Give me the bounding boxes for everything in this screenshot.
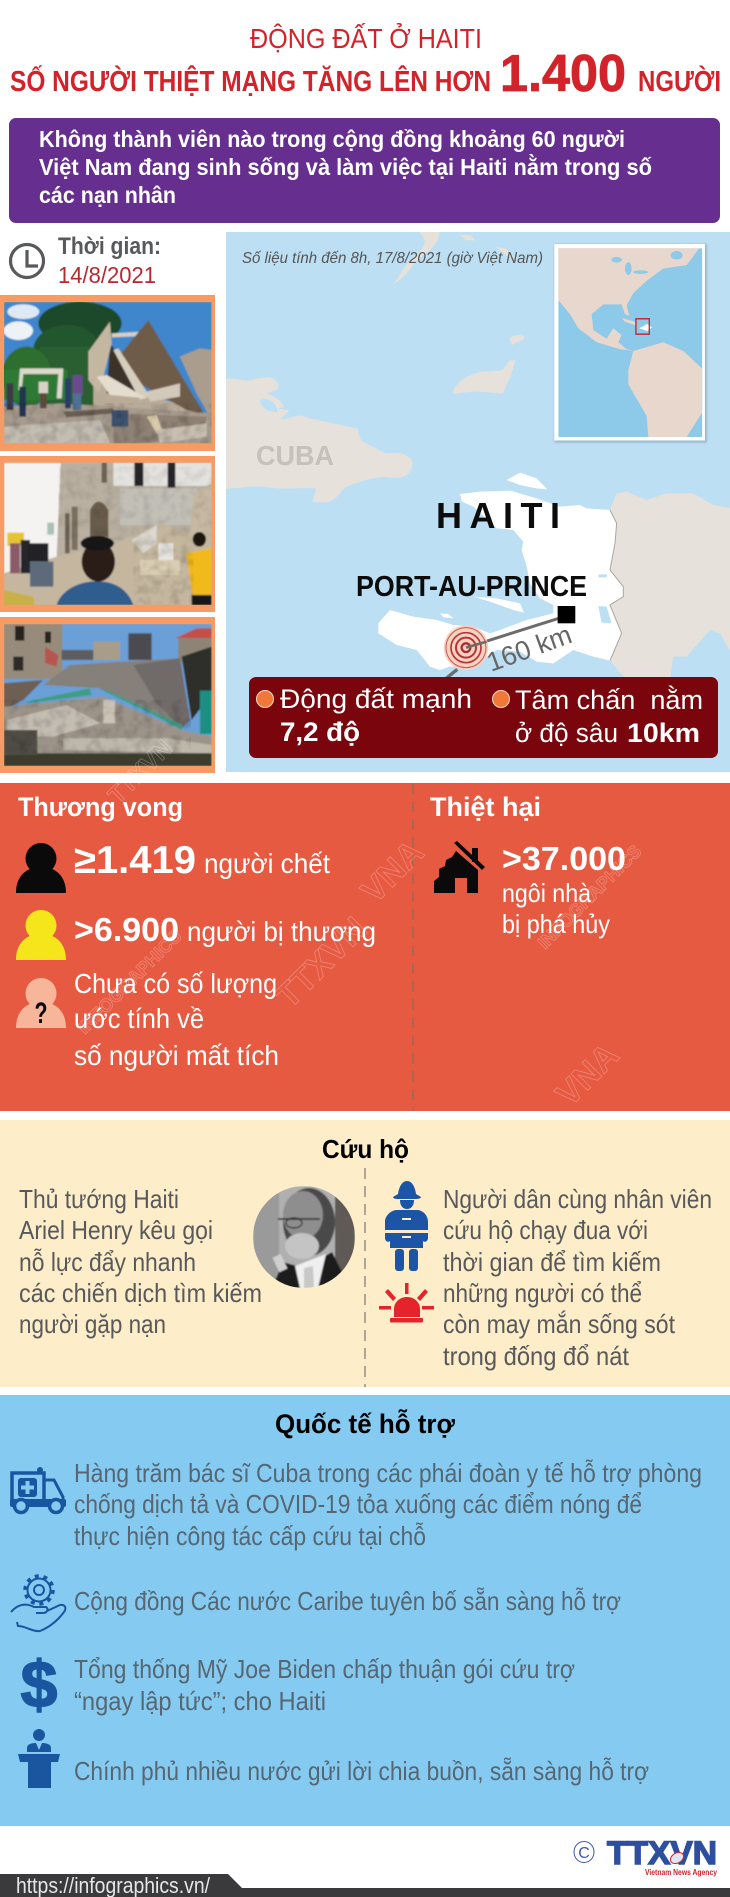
- capital marker: [558, 606, 575, 623]
- stat: missing: [74, 968, 279, 1071]
- depth text: 10km: [627, 718, 700, 748]
- photo 3: collapsed house: [0, 617, 215, 773]
- stat: injured: >6.900: [74, 911, 179, 948]
- icon: injured person: [16, 910, 66, 960]
- logo swoosh: [668, 1850, 686, 1866]
- map: lakes: [598, 574, 612, 623]
- title: [10, 22, 721, 103]
- title figure: 1.400: [500, 45, 626, 103]
- map: Hispaniola: [378, 473, 730, 681]
- text: Cuban doctors: thực hiện công tác cấp cứu tại chỗ: [74, 1521, 426, 1551]
- title line 1: ĐỘNG ĐẤT Ở HAITI: [250, 22, 482, 54]
- watermarks: INFOGRAPHICS: [74, 926, 185, 1038]
- map: Dominican Republic land: [610, 492, 730, 680]
- text: prime minister: người gặp nạn: [19, 1309, 166, 1339]
- line to capital: [486, 617, 558, 642]
- photo: Ariel Henry: [253, 1186, 355, 1288]
- stat: houses: ngôi nhà: [502, 878, 591, 908]
- depth text: ở độ sâu: [515, 718, 618, 748]
- text: rescuers: [443, 1184, 712, 1371]
- line to callout: [445, 668, 458, 677]
- stat: injured: [74, 911, 376, 948]
- summary text: Không thành viên nào trong cộng đồng khoảng 60 người: [39, 126, 625, 152]
- watermarks: TTXVN: [269, 910, 374, 1016]
- stat: missing: Chưa có số lượng: [74, 968, 277, 999]
- map: Haiti land: [378, 491, 623, 670]
- source note: Số liệu tính đến 8h, 17/8/2021 (giờ Việt Nam): [242, 250, 543, 267]
- icon: dead person: [16, 843, 66, 893]
- text: rescuers: còn may mắn sống sót: [443, 1309, 676, 1339]
- label: Port-au-Prince: PORT-AU-PRINCE: [356, 571, 587, 603]
- footer bar: [0, 1873, 730, 1897]
- panel: international aid: [0, 1395, 730, 1826]
- text: rescuers: thời gian để tìm kiếm: [443, 1247, 661, 1277]
- text: prime minister: Ariel Henry kêu gọi: [19, 1215, 213, 1245]
- text: prime minister: nỗ lực đẩy nhanh: [19, 1247, 196, 1277]
- label: distance: 160 km: [483, 619, 576, 678]
- icon: epicenter rings: [444, 625, 488, 670]
- bullet: [256, 690, 274, 708]
- text: Caribbean: Cộng đồng Các nước Caribe tuyên bố sẵn sàng hỗ trợ: [74, 1586, 621, 1616]
- panel: rescue: [0, 1120, 730, 1387]
- icon: gear and hand: [11, 1576, 65, 1631]
- magnitude text: 7,2 độ: [280, 717, 360, 747]
- heading: rescue: Cứu hộ: [322, 1134, 409, 1164]
- icon: damaged house: [434, 841, 485, 893]
- watermarks: TTXVN: [103, 735, 178, 809]
- stat: deaths: [74, 839, 330, 882]
- text: Biden: Tổng thống Mỹ Joe Biden chấp thuận gói cứu trợ: [74, 1654, 575, 1684]
- panel: casualties and damage: [0, 735, 730, 1114]
- icon: firefighter: [385, 1181, 428, 1271]
- copyright symbol: [574, 1842, 594, 1862]
- heading: damage: Thiệt hại: [430, 792, 541, 822]
- photo 1: collapsed building: [0, 295, 215, 451]
- icon: alarm light: [379, 1283, 434, 1322]
- time block: [58, 233, 161, 288]
- watermarks: INFOGRAPHICS: [534, 841, 645, 953]
- inset shadow: [554, 244, 707, 443]
- time block: Thời gian:: [58, 233, 161, 260]
- map: north islands and Cuba: [226, 232, 525, 503]
- photo 2: damaged church and man: [0, 456, 215, 612]
- panel: purple summary: [9, 118, 720, 223]
- title line 2: SỐ NGƯỜI THIỆT MẠNG TĂNG LÊN HƠN: [10, 64, 491, 98]
- stat: deaths: người chết: [204, 848, 330, 879]
- summary text: Việt Nam đang sinh sống và làm việc tại Haiti nằm trong số: [39, 153, 652, 180]
- map: nearby islands: [440, 473, 547, 618]
- callout: magnitude and depth: [249, 677, 718, 758]
- stat: missing: ước tính về: [74, 1003, 204, 1034]
- stat: injured: người bị thương: [187, 916, 376, 947]
- text: rescuers: những người có thể: [443, 1278, 642, 1308]
- icon: clock: [10, 244, 44, 278]
- text: Biden: “ngay lập tức”; cho Haiti: [74, 1686, 326, 1716]
- heading: international aid: Quốc tế hỗ trợ: [275, 1408, 456, 1439]
- stat: houses: [502, 840, 626, 939]
- text: rescuers: trong đống đổ nát: [443, 1341, 630, 1371]
- bullet: [492, 690, 510, 708]
- label: Haiti: HAITI: [436, 495, 560, 536]
- logo: TTXVN: [574, 1835, 717, 1877]
- stat: missing: số người mất tích: [74, 1040, 279, 1071]
- text: prime minister: [19, 1184, 262, 1339]
- text: rescuers: cứu hộ chạy đua với: [443, 1215, 648, 1245]
- icon: dollar: $: [21, 1647, 57, 1721]
- magnitude text: Động đất mạnh: [280, 684, 472, 714]
- heading: casualties: Thương vong: [18, 792, 183, 822]
- summary text: [39, 126, 652, 208]
- watermarks: VNA: [549, 1036, 626, 1114]
- watermarks: [74, 735, 645, 1114]
- summary text: các nạn nhân: [39, 182, 176, 208]
- copyright symbol: C: [578, 1845, 590, 1862]
- inset map: [554, 244, 705, 440]
- icon: speaker at podium: [18, 1729, 60, 1788]
- text: Cuban doctors: chống dịch tả và COVID-19 tỏa xuống các điểm nóng để: [74, 1489, 642, 1519]
- logo wordmark: TTXVN: [607, 1835, 717, 1871]
- text: prime minister: Thủ tướng Haiti: [19, 1184, 179, 1214]
- time block: 14/8/2021: [58, 262, 156, 288]
- text: Biden: [74, 1654, 575, 1716]
- icon: missing person: [16, 978, 66, 1030]
- icon: ambulance: [10, 1467, 66, 1512]
- depth text: [515, 684, 703, 748]
- panel: map: [226, 232, 730, 773]
- text: prime minister: các chiến dịch tìm kiếm: [19, 1278, 262, 1308]
- stat: houses: bị phá hủy: [502, 909, 610, 939]
- watermarks: VNA: [354, 833, 431, 911]
- depth text: Tâm chấn nằm: [515, 684, 703, 715]
- magnitude text: [280, 684, 472, 747]
- text: Cuban doctors: [74, 1458, 702, 1551]
- stat: houses: >37.000: [502, 840, 626, 877]
- label: Cuba: CUBA: [256, 440, 334, 471]
- stat: deaths: ≥1.419: [74, 839, 196, 882]
- icon: missing person: ?: [34, 997, 48, 1030]
- text: governments: Chính phủ nhiều nước gửi lời chia buồn, sẵn sàng hỗ trợ: [74, 1756, 649, 1786]
